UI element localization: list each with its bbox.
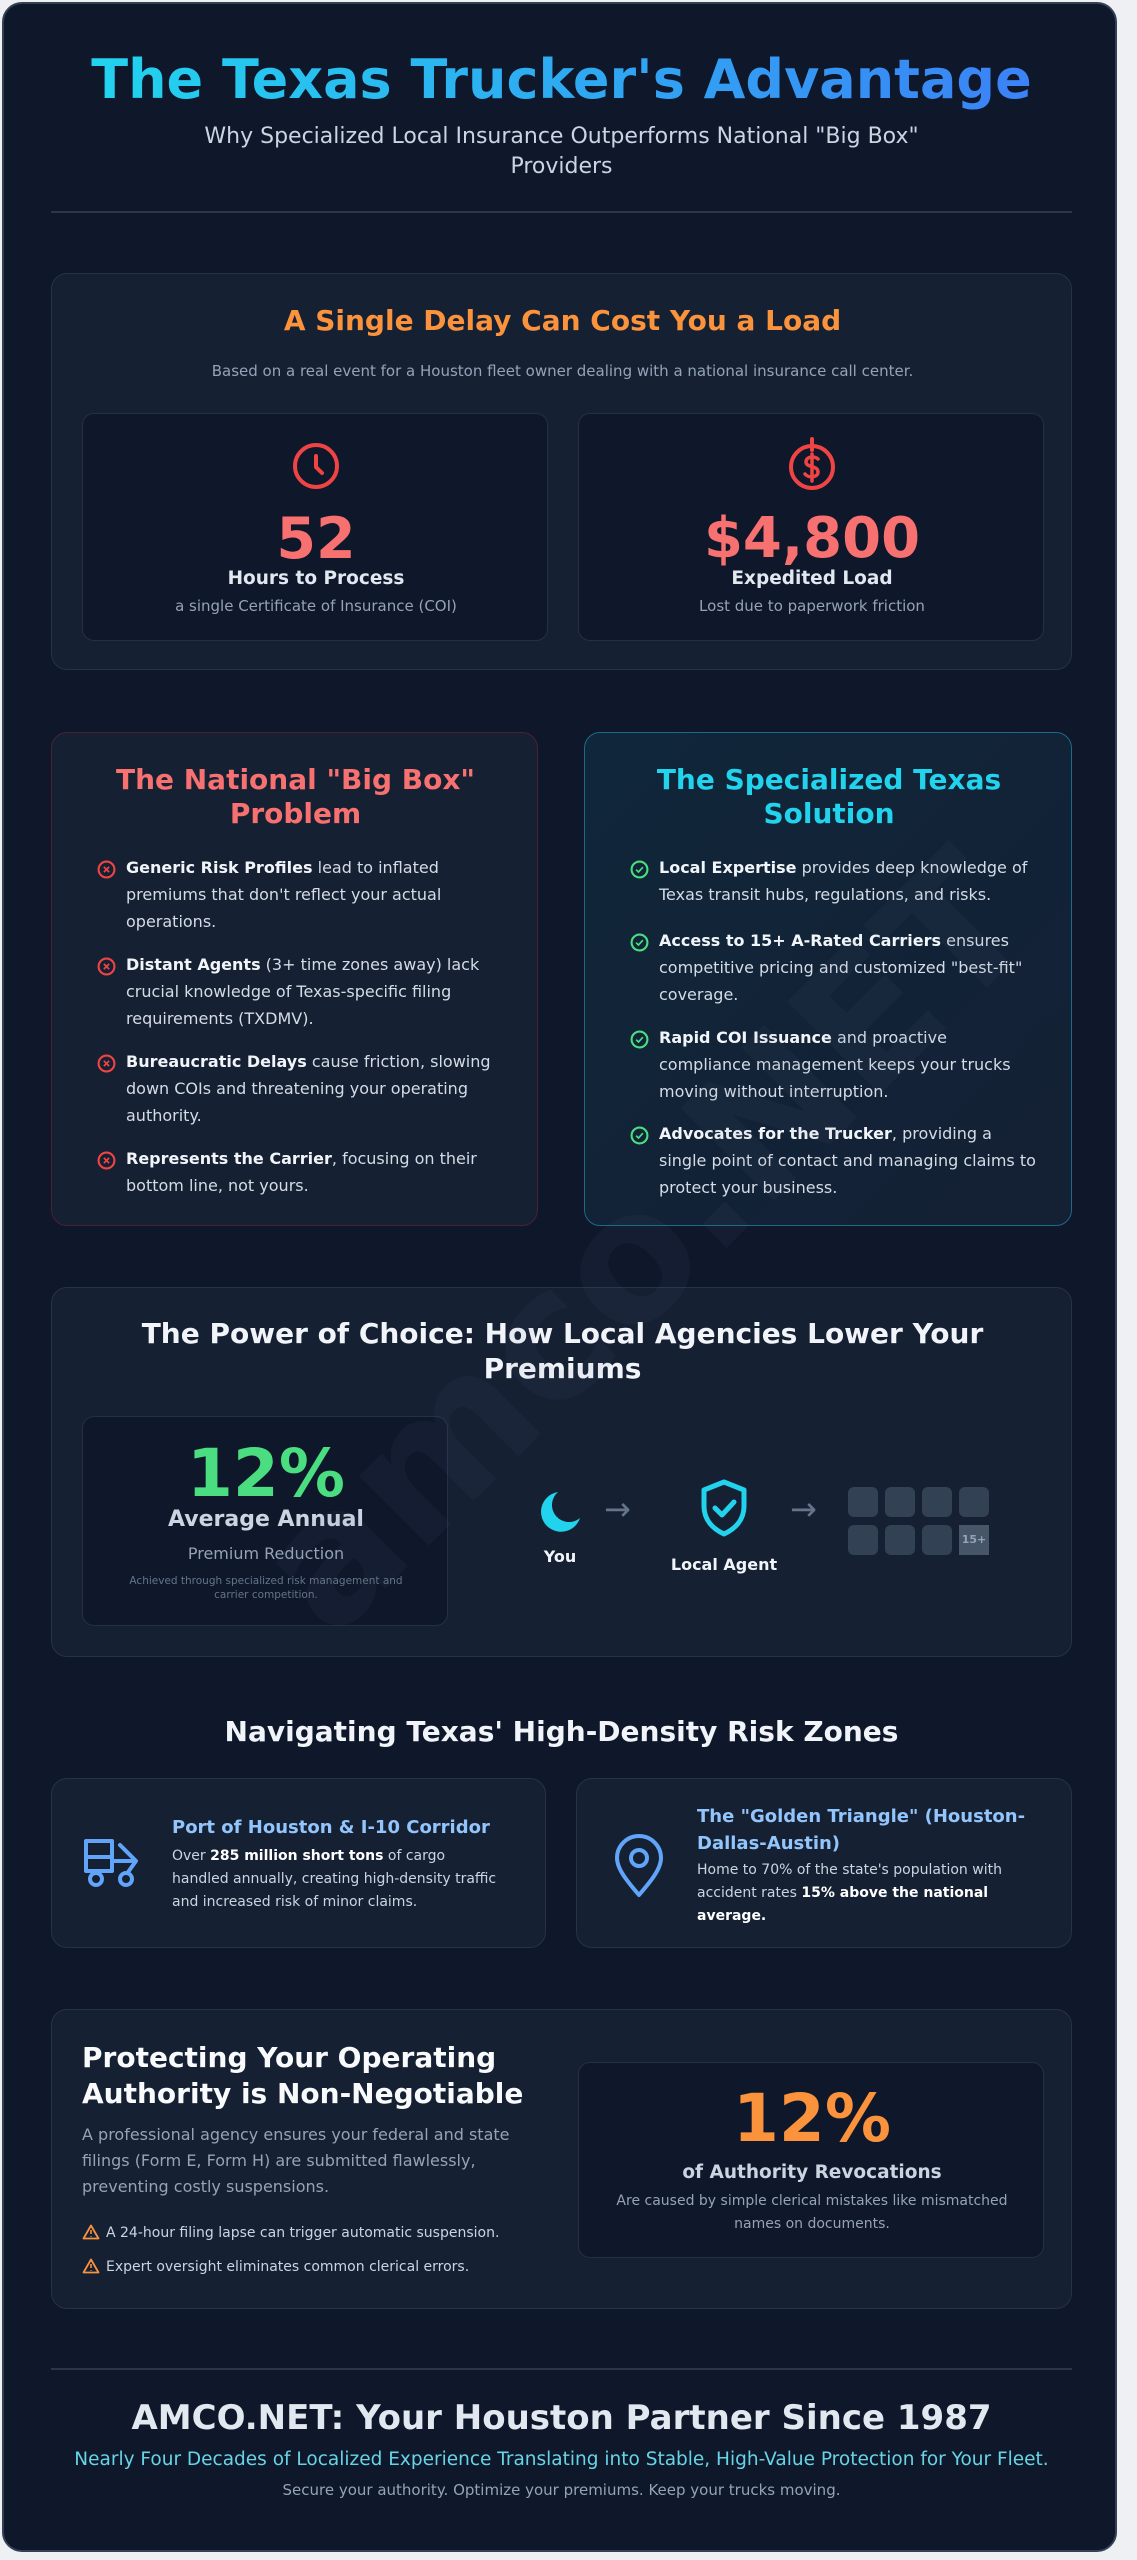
- arrow: →: [604, 1490, 631, 1528]
- solution list: Advocates for the Trucker, providing a single point of contact and managing claims to protect your business.: [659, 1124, 1036, 1197]
- stat: 12% revocations: [578, 2062, 1044, 2258]
- stat: $4,800: Expedited Load: [731, 568, 893, 589]
- heading: The National "Big Box" Problem: [116, 763, 475, 830]
- stat: 12% reduction: [82, 1416, 448, 1626]
- subtitle: Why Specialized Local Insurance Outperforms National "Big Box" Providers: [204, 124, 919, 179]
- stat: 12% revocations: Are caused by simple clerical mistakes like mismatched names on documents.: [616, 2193, 1008, 2232]
- footer: Secure your authority. Optimize your premiums. Keep your trucks moving.: [282, 2481, 840, 2499]
- warning bullets: Expert oversight eliminates common clerical errors.: [106, 2259, 469, 2275]
- risk card: golden triangle: [576, 1778, 1072, 1948]
- flow diagram: Local Agent: [671, 1555, 777, 1574]
- problem list: Bureaucratic Delays cause friction, slowing down COIs and threatening your operating authority.: [126, 1052, 491, 1125]
- risk card: golden triangle: Home to 70% of the state's population with accident rates 15% above the national average.: [697, 1862, 1002, 1924]
- carrier grid: [848, 1487, 989, 1555]
- watermark: amco.NET: [215, 815, 1073, 1673]
- stat: 52 hours: a single Certificate of Insurance (COI): [175, 597, 457, 615]
- flow diagram: [541, 1480, 989, 1574]
- heading: Protecting Your Operating Authority is Non-Negotiable: [82, 2041, 523, 2110]
- stat: 12% revocations: 12%: [733, 2080, 891, 2157]
- flow diagram: You: [544, 1547, 576, 1566]
- icon: clock: [293, 443, 339, 489]
- stat: $4,800: $4,800: [704, 506, 920, 571]
- stat: 12% reduction: 12%: [187, 1435, 345, 1512]
- risk card: port of houston: [51, 1778, 546, 1948]
- carrier grid: 15+: [962, 1533, 986, 1546]
- stat: $4,800: Lost due to paperwork friction: [699, 597, 925, 615]
- title: The Texas Trucker's Advantage: [91, 48, 1032, 111]
- note: Based on a real event for a Houston fleet owner dealing with a national insurance call center.: [212, 362, 913, 380]
- icon: dollar: [789, 437, 835, 490]
- panel: big box problem: [51, 732, 538, 1226]
- risk card: port of houston: and increased risk of minor claims.: [172, 1894, 417, 1910]
- problem list: Distant Agents (3+ time zones away) lack crucial knowledge of Texas-specific filing requirements (TXDMV).: [126, 955, 479, 1028]
- arrow: →: [790, 1490, 817, 1528]
- solution list: Access to 15+ A-Rated Carriers ensures competitive pricing and customized "best-fit" coverage.: [659, 931, 1022, 1004]
- problem list: Generic Risk Profiles lead to inflated premiums that don't reflect your actual operations.: [126, 858, 441, 931]
- panel: operating authority: [51, 2009, 1072, 2309]
- warning bullets: A 24-hour filing lapse can trigger automatic suspension.: [106, 2225, 499, 2241]
- panel: single delay: [51, 273, 1072, 670]
- risk card: golden triangle: The "Golden Triangle" (Houston-Dallas-Austin): [697, 1806, 1025, 1854]
- icon: shield (local agent): [702, 1480, 746, 1536]
- heading: risk zones: Navigating Texas' High-Density Risk Zones: [225, 1715, 898, 1748]
- problem list: Represents the Carrier, focusing on their bottom line, not yours.: [126, 1149, 477, 1195]
- solution list: Local Expertise provides deep knowledge of Texas transit hubs, regulations, and risks.: [659, 858, 1027, 904]
- solution list: [630, 858, 1036, 1197]
- stat: 52 hours: Hours to Process: [228, 568, 404, 589]
- solution list: Rapid COI Issuance and proactive compliance management keeps your trucks moving without interruption.: [659, 1028, 1011, 1101]
- stat: 52 hours: 52: [276, 506, 356, 572]
- stat: 52 hours: [82, 413, 548, 641]
- footer: Nearly Four Decades of Localized Experience Translating into Stable, High-Value Protection for Your Fleet.: [74, 2449, 1049, 2470]
- heading: The Specialized Texas Solution: [657, 763, 1001, 830]
- heading: A Single Delay Can Cost You a Load: [284, 304, 841, 337]
- heading: The Power of Choice: How Local Agencies Lower Your Premiums: [142, 1317, 983, 1385]
- risk card: port of houston: Over 285 million short tons of cargo: [172, 1848, 445, 1864]
- stat: 12% reduction: Average Annual: [168, 1507, 364, 1532]
- icon: moon (you): [541, 1492, 580, 1532]
- footer: [74, 2398, 1049, 2499]
- stat: 12% reduction: Premium Reduction: [188, 1544, 344, 1563]
- stat: 12% reduction: Achieved through specialized risk management and carrier competition.: [129, 1575, 403, 1601]
- icon: map pin: [615, 1834, 663, 1898]
- risk card: port of houston: Port of Houston & I-10 Corridor: [172, 1817, 490, 1838]
- stat: $4,800: [578, 413, 1044, 641]
- icon: truck: [84, 1839, 138, 1887]
- risk card: port of houston: handled annually, creating high-density traffic: [172, 1871, 496, 1887]
- panel: power of choice: [51, 1287, 1072, 1657]
- stat: 12% revocations: of Authority Revocations: [682, 2162, 942, 2183]
- paragraph: A professional agency ensures your federal and state filings (Form E, Form H) are submitted flawlessly, preventing costly suspensions.: [82, 2125, 509, 2196]
- warning bullets: [82, 2224, 499, 2275]
- problem list: [98, 858, 491, 1195]
- footer: AMCO.NET: Your Houston Partner Since 1987: [131, 2398, 992, 2438]
- panel: texas solution: [584, 732, 1072, 1226]
